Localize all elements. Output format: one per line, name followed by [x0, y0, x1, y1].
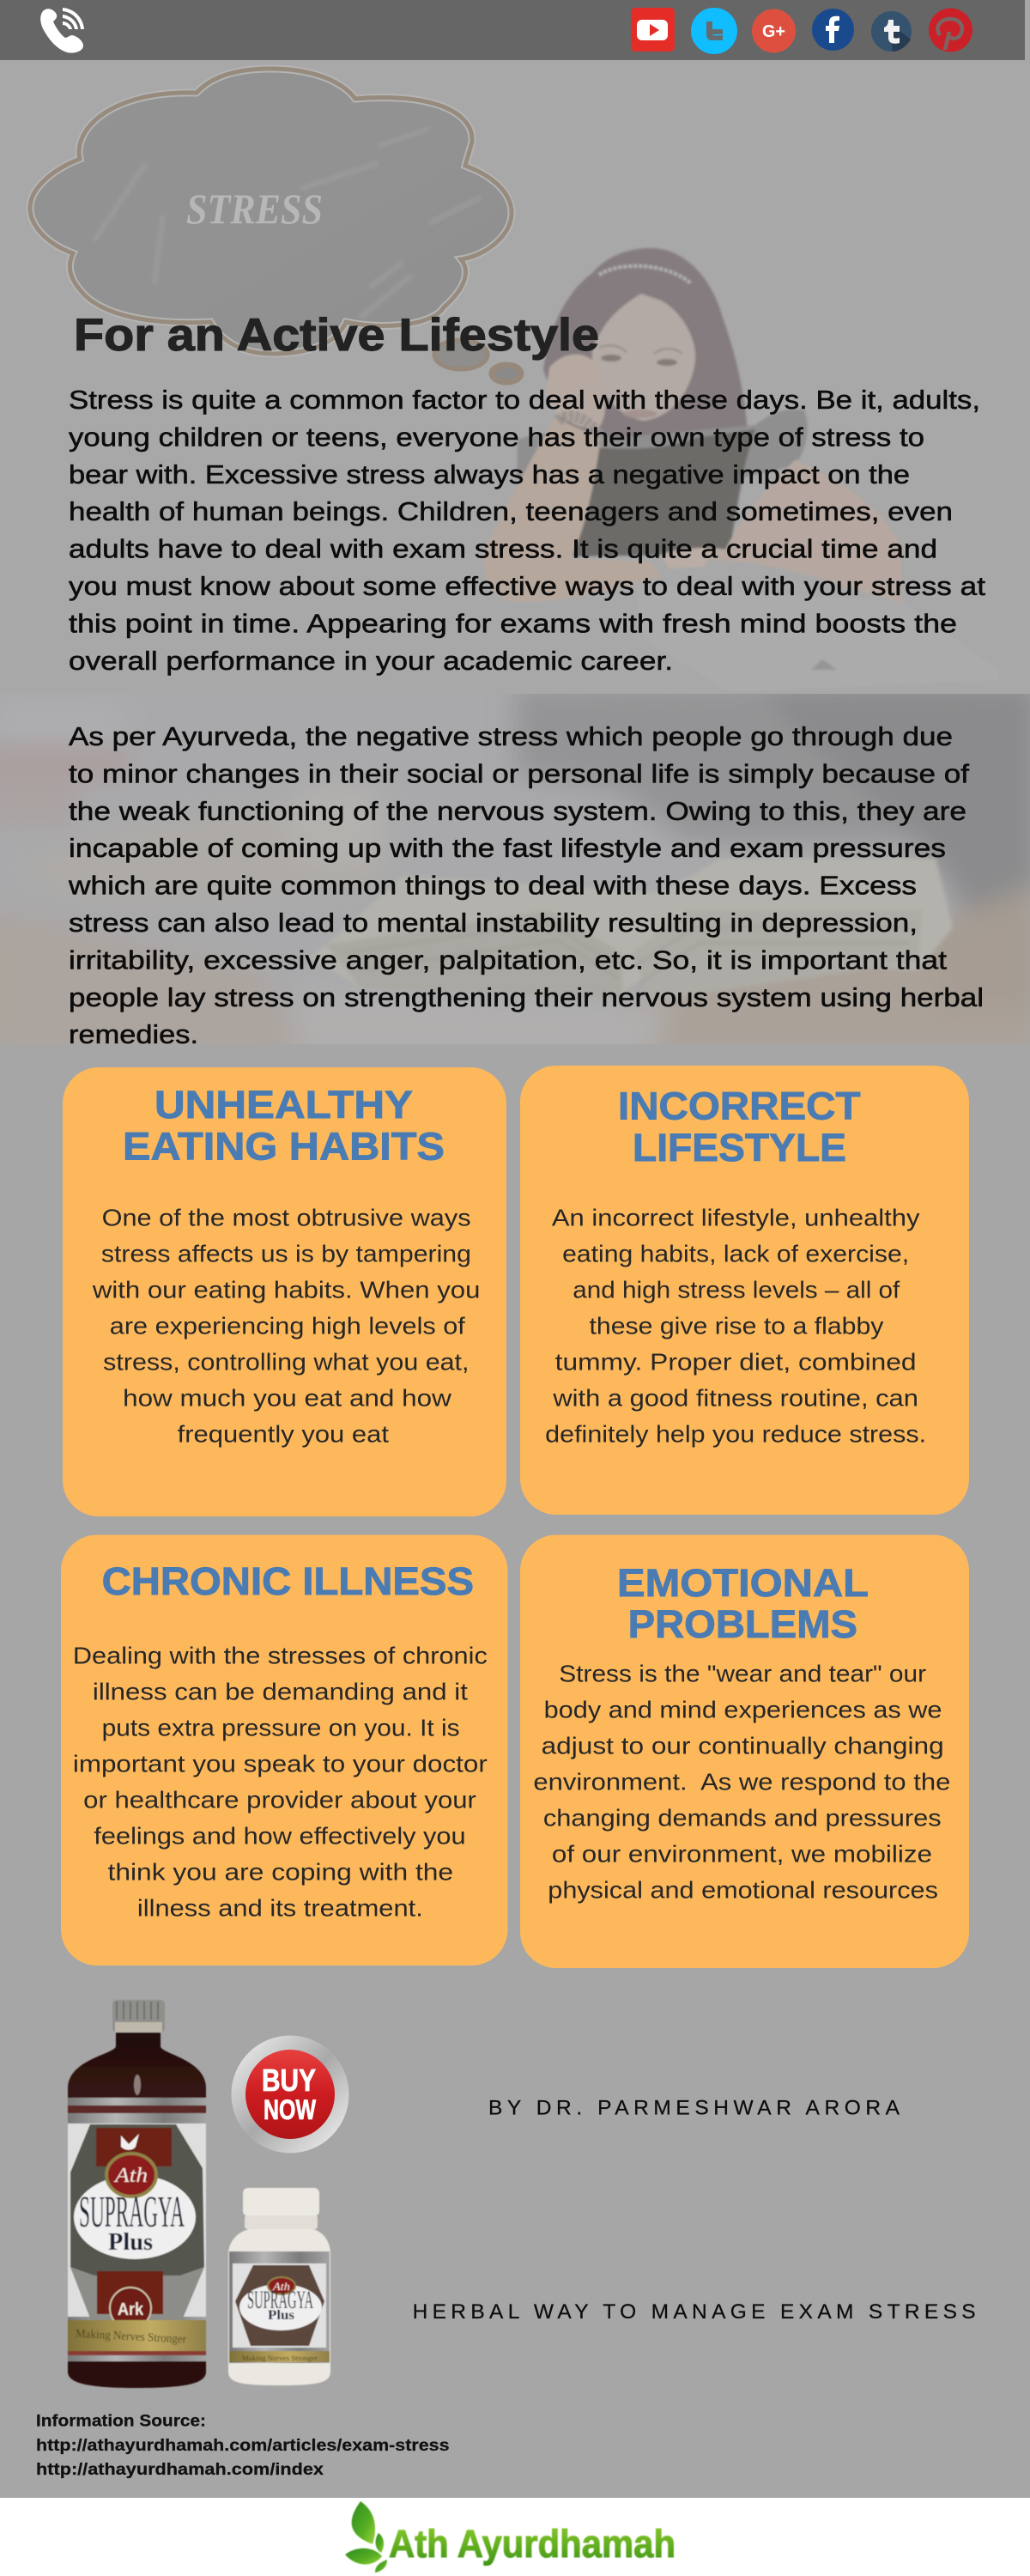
product: small bottle: Making Nerves Stronger — [242, 2354, 318, 2362]
heading: emotional problems: EMOTIONAL — [617, 1561, 869, 1605]
product: large bottle: Plus — [108, 2228, 153, 2256]
product: small bottle: SUPRAGYA — [247, 2286, 313, 2314]
heading: chronic illness: CHRONIC ILLNESS — [102, 1559, 474, 1603]
product: large bottle — [68, 2000, 206, 2388]
leaf mark — [121, 2134, 139, 2150]
eyes — [601, 355, 621, 361]
text: emotional problems: body and mind experiences as we — [544, 1697, 942, 1723]
text: unhealthy eating habits: stress, controlling what you eat, — [103, 1349, 469, 1376]
bottle glass — [68, 2032, 206, 2388]
intro paragraph 1: overall performance in your academic career. — [69, 646, 673, 676]
wordmark: Ath Ayurdhamah — [389, 2522, 676, 2566]
heading: emotional problems: PROBLEMS — [628, 1602, 857, 1646]
thought bubbles — [434, 340, 488, 369]
text: unhealthy eating habits: frequently you eat — [178, 1421, 389, 1448]
text: emotional problems — [533, 1661, 950, 1904]
intro paragraph 2: remedies. — [69, 1019, 198, 1049]
text: emotional problems: of our environment, we mobilize — [552, 1841, 932, 1868]
hand area — [26, 790, 386, 904]
information source: Information Source: — [36, 2413, 206, 2430]
chalk smudges — [94, 129, 481, 318]
bracelet — [558, 416, 605, 447]
white oval — [74, 2175, 196, 2259]
icon: leaves — [345, 2501, 387, 2573]
icon: twitter — [691, 8, 737, 54]
intro paragraph 1: you must know about some effective ways to deal with your stress at — [69, 571, 985, 601]
shirt sleeves — [517, 410, 808, 507]
text: emotional problems: environment. As we respond to the — [533, 1769, 950, 1795]
text: emotional problems: physical and emotional resources — [548, 1877, 938, 1904]
icon: pinterest — [929, 9, 972, 52]
foil label — [68, 2098, 206, 2361]
small foil label — [229, 2251, 330, 2363]
text: emotional problems: adjust to our continually changing — [542, 1733, 944, 1759]
intro paragraph 2: which are quite common things to deal with these days. Excess — [68, 871, 917, 901]
intro paragraph 1: young children or teens, everyone has their own type of stress to — [69, 422, 924, 452]
hand on table — [661, 549, 712, 568]
intro paragraph 1: bear with. Excessive stress always has a negative impact on the — [69, 459, 910, 489]
Ark badge: Ark — [118, 2300, 144, 2319]
lips — [623, 410, 657, 418]
girl photo — [484, 248, 998, 692]
panel: emotional problems — [520, 1535, 969, 1968]
intro paragraph 2: the weak functioning of the nervous system. Owing to this, they are — [69, 796, 966, 826]
footer — [0, 2498, 1030, 2576]
text: incorrect lifestyle: eating habits, lack of exercise, — [562, 1241, 909, 1267]
button: buy now: BUY — [262, 2063, 316, 2098]
intro paragraph 2 — [68, 721, 984, 1049]
open book — [309, 859, 953, 1000]
product: small bottle: Ath — [272, 2280, 290, 2293]
dark chair area — [512, 694, 905, 845]
icon: facebook — [812, 9, 854, 51]
panel: unhealthy eating habits — [63, 1067, 506, 1516]
shirt torso — [573, 429, 755, 556]
information source — [36, 2413, 450, 2479]
STRESS word: STRESS — [186, 185, 323, 233]
text: unhealthy eating habits: how much you eat and how — [123, 1385, 451, 1412]
title: For an Active Lifestyle — [74, 310, 599, 361]
text: incorrect lifestyle: An incorrect lifestyle, unhealthy — [552, 1205, 920, 1231]
header bar — [0, 0, 1025, 60]
Ath badge: Ath — [113, 2165, 148, 2187]
intro paragraph 2: incapable of coming up with the fast lifestyle and exam pressures — [69, 833, 946, 863]
intro paragraph 2: people lay stress on strengthening their nervous system using herbal — [69, 982, 984, 1012]
heading: incorrect lifestyle: INCORRECT — [618, 1084, 860, 1128]
text: chronic illness: illness and its treatment. — [137, 1895, 423, 1922]
heading: unhealthy eating habits — [123, 1083, 445, 1168]
information source: http://athayurdhamah.com/articles/exam-stress — [36, 2437, 450, 2455]
Ark badge — [110, 2287, 151, 2329]
subject line: HERBAL WAY TO MANAGE EXAM STRESS — [413, 2300, 976, 2324]
right arm — [661, 459, 901, 603]
text: incorrect lifestyle: and high stress levels – all of — [573, 1277, 900, 1303]
product: small bottle: Plus — [268, 2308, 294, 2323]
product: small bottle — [228, 2188, 330, 2385]
text: unhealthy eating habits: One of the most obtrusive ways — [102, 1205, 471, 1231]
text: emotional problems: changing demands and pressures — [543, 1805, 942, 1832]
thought cloud with the word STRESS — [30, 69, 521, 382]
gold band — [68, 2320, 206, 2351]
text: chronic illness: puts extra pressure on you. It is — [102, 1715, 460, 1741]
text: unhealthy eating habits: are experiencing high levels of — [110, 1313, 465, 1340]
icon: phone — [40, 8, 84, 53]
logo — [345, 2501, 676, 2573]
intro paragraph 1 — [69, 385, 985, 676]
intro paragraph 2: to minor changes in their social or personal life is simply because of — [69, 758, 969, 788]
text: chronic illness: or healthcare provider about your — [83, 1787, 476, 1814]
text: chronic illness: think you are coping with the — [108, 1859, 453, 1886]
text: chronic illness: important you speak to your doctor — [73, 1751, 488, 1777]
icon: google plus — [752, 9, 796, 53]
hand on cheek — [546, 355, 605, 429]
wood table — [0, 910, 309, 1056]
hair — [543, 248, 748, 550]
book under the girl — [635, 584, 998, 692]
text: incorrect lifestyle: these give rise to a flabby — [589, 1313, 884, 1340]
text: incorrect lifestyle: definitely help you reduce stress. — [545, 1421, 926, 1448]
icon: tumblr — [871, 11, 912, 52]
text: unhealthy eating habits — [92, 1205, 480, 1448]
reddish books — [0, 747, 129, 778]
author line: BY DR. PARMESHWAR ARORA — [488, 2097, 900, 2120]
button: buy now — [232, 2035, 348, 2154]
text: chronic illness: feelings and how effectively you — [94, 1823, 466, 1850]
intro paragraph 1: adults have to deal with exam stress. It is quite a crucial time and — [69, 534, 937, 564]
heading: emotional problems — [617, 1561, 869, 1646]
text: unhealthy eating habits: with our eating habits. When you — [92, 1277, 480, 1303]
panel: incorrect lifestyle — [520, 1066, 969, 1515]
bottle cap — [112, 2000, 165, 2032]
intro paragraph 2: As per Ayurveda, the negative stress which people go through due — [69, 721, 953, 751]
label ornament — [70, 2124, 204, 2320]
icon: google plus: G+ — [762, 22, 785, 41]
heading: incorrect lifestyle — [618, 1084, 860, 1170]
text: chronic illness — [73, 1643, 488, 1922]
intro paragraph 2: irritability, excessive anger, palpitation, etc. So, it is important that — [69, 945, 947, 975]
product: large bottle: SUPRAGYA — [79, 2188, 185, 2237]
photo band — [0, 678, 1030, 1056]
small bottle cap — [243, 2188, 319, 2216]
panel: chronic illness — [61, 1535, 508, 1965]
text: chronic illness: Dealing with the stresses of chronic — [73, 1643, 488, 1669]
button: buy now: NOW — [264, 2094, 317, 2125]
icon: youtube — [631, 8, 675, 52]
face — [592, 294, 695, 421]
eyebrows — [599, 345, 682, 354]
text: unhealthy eating habits: stress affects us is by tampering — [101, 1241, 471, 1267]
text: chronic illness: illness can be demanding and it — [93, 1679, 468, 1705]
text: incorrect lifestyle — [545, 1205, 926, 1448]
small gold band — [229, 2351, 330, 2362]
intro paragraph 2: stress can also lead to mental instability resulting in depression, — [69, 908, 918, 938]
intro paragraph 1: health of human beings. Children, teenagers and sometimes, even — [69, 496, 953, 526]
gold band: Making Nerves Stronger — [76, 2328, 187, 2347]
intro paragraph 1: this point in time. Appearing for exams with fresh mind boosts the — [69, 608, 957, 638]
heading: incorrect lifestyle: LIFESTYLE — [633, 1126, 846, 1170]
information source: http://athayurdhamah.com/index — [36, 2461, 324, 2479]
Ath badge — [106, 2154, 156, 2196]
left arm — [484, 418, 661, 602]
small bottle body — [228, 2229, 330, 2385]
intro paragraph 1: Stress is quite a common factor to deal with these days. Be it, adults, — [69, 385, 980, 415]
heading: unhealthy eating habits: EATING HABITS — [123, 1125, 445, 1168]
heading: unhealthy eating habits: UNHEALTHY — [154, 1083, 413, 1127]
text: incorrect lifestyle: with a good fitness routine, can — [552, 1385, 918, 1412]
text: incorrect lifestyle: tummy. Proper diet, combined — [555, 1349, 917, 1376]
text: emotional problems: Stress is the "wear and tear" our — [559, 1661, 926, 1687]
headband — [599, 266, 691, 283]
